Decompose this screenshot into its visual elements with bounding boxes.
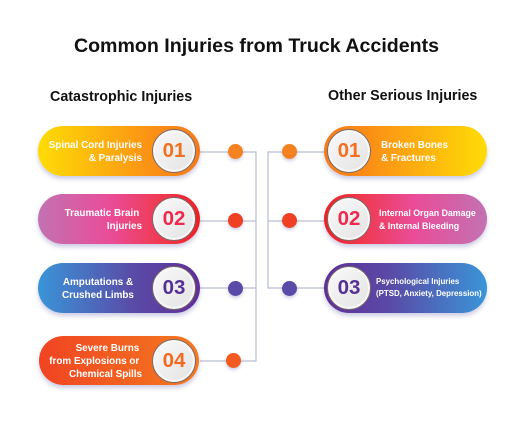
panel: severe burns [39,336,199,385]
number badge: 04 [163,348,185,372]
label: Injuries [107,220,142,232]
label: Amputations & [63,276,133,288]
number badge: 01 [163,139,185,162]
label: Broken Bones [381,140,448,150]
dot 1 left [228,144,243,159]
panel: internal organ damage [324,194,487,244]
number badge [327,266,371,310]
label: Spinal Cord Injuries [49,140,142,150]
label [376,277,482,298]
panel: psychological injuries [324,263,487,313]
number badge: 03 [338,276,360,299]
panel: spinal cord injuries [38,126,200,176]
dot 3 right [282,281,297,296]
heading: other serious injuries: Other Serious Injuries [328,88,477,104]
number badge [152,129,196,173]
label: Crushed Limbs [62,290,134,300]
label [62,276,134,300]
label [381,140,448,164]
label: (PTSD, Anxiety, Depression) [376,289,482,298]
panel: amputations [38,263,200,313]
panel: traumatic brain injuries [38,194,200,244]
label: & Internal Bleeding [379,220,459,230]
dot 2 right [282,213,297,228]
title: Common Injuries from Truck Accidents [74,35,439,57]
label: & Paralysis [89,152,142,164]
label: Traumatic Brain [65,208,139,218]
number badge [152,338,196,382]
label: Severe Burns [76,343,139,354]
number badge [152,266,196,310]
number badge: 03 [163,276,185,299]
label: from Explosions or [49,356,139,367]
label [379,208,476,231]
dot 1 right [282,144,297,159]
number badge: 01 [338,139,360,162]
number badge: 02 [163,207,185,230]
number badge: 02 [338,207,360,230]
panel: broken bones [324,126,487,176]
label: Internal Organ Damage [379,208,476,218]
dot 4 left [226,353,241,368]
number badge [152,197,196,241]
dot 2 left [228,213,243,228]
heading: catastrophic injuries: Catastrophic Injuries [50,89,192,105]
label: & Fractures [381,152,436,164]
label: Chemical Spills [69,369,142,380]
label [49,343,142,380]
number badge [327,197,371,241]
number badge [327,129,371,173]
label [49,140,142,164]
dot 3 left [228,281,243,296]
label: Psychological Injuries [376,277,459,286]
label [64,208,142,232]
